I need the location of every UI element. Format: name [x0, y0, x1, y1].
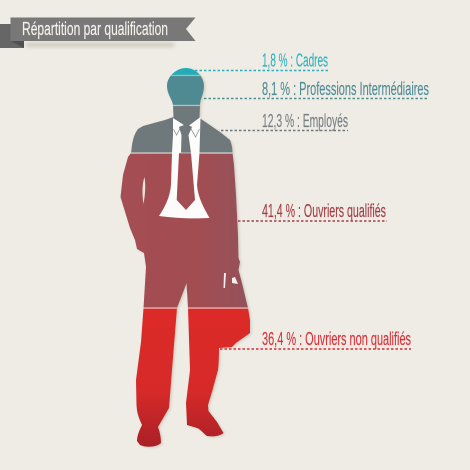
- tie: [179, 124, 192, 153]
- title ribbon: [0, 18, 196, 48]
- label: Employés: [221, 110, 348, 131]
- label: Cadres: [195, 50, 328, 70]
- label: Employés: 12,3 % : Employés: [262, 110, 348, 131]
- man silhouette chart: [120, 68, 252, 448]
- briefcase handle gaps: [224, 273, 238, 288]
- collar lines: [174, 126, 200, 137]
- shirt: [159, 117, 210, 218]
- label: Cadres: 1,8 % : Cadres: [262, 50, 328, 70]
- title text: Répartition par qualification: [22, 18, 168, 39]
- pocket gap: [142, 177, 145, 204]
